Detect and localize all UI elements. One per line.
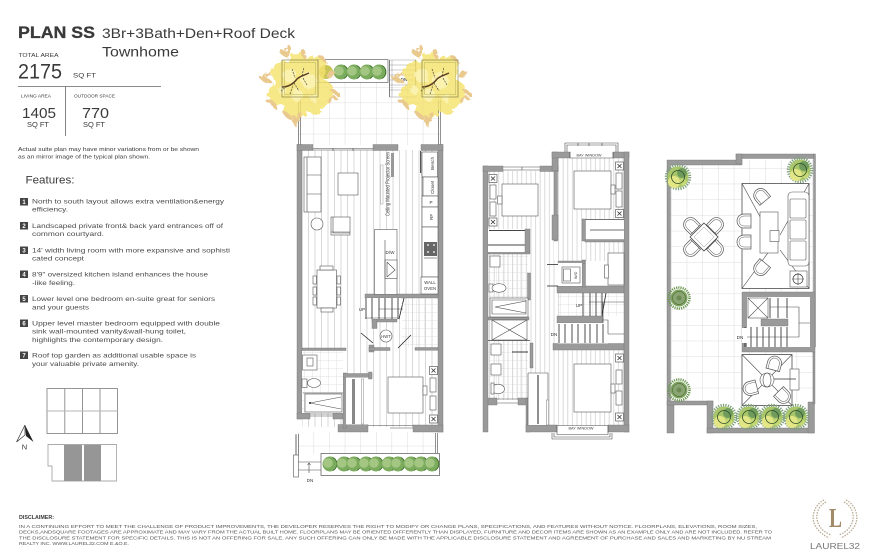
living area: SQ FT	[27, 122, 50, 129]
roof planter plants	[712, 406, 808, 428]
north arrow: N	[22, 442, 27, 452]
bay window top	[565, 143, 618, 158]
deck tile	[670, 160, 815, 402]
armchair	[331, 217, 350, 235]
feature 5: Lower level one bedroom en-suite great for seniors	[32, 296, 216, 303]
top-right plant	[788, 158, 812, 182]
second floor plan	[483, 143, 629, 439]
ground floor plan	[260, 45, 473, 483]
roof deck plan	[666, 154, 816, 433]
right bottom bedroom	[574, 354, 624, 421]
key plan: upper building block	[47, 388, 118, 434]
feature 1	[20, 198, 225, 214]
plan variation note: as an mirror image of the typical plan shown.	[18, 154, 150, 160]
linen closet	[492, 320, 527, 340]
upper bath	[488, 254, 530, 317]
roof access stair: DN	[737, 335, 743, 340]
side plants	[668, 288, 690, 400]
feature 3: 3	[22, 248, 26, 254]
utility hall tile	[402, 298, 438, 347]
feature 4	[20, 270, 208, 287]
outdoor space: SQ FT	[83, 122, 106, 129]
sofa	[304, 157, 321, 212]
coffee table	[338, 173, 358, 195]
north arrow	[16, 425, 34, 452]
staircase: UP	[359, 307, 365, 312]
study desk	[604, 253, 624, 285]
outdoor space: 770	[82, 106, 109, 122]
disclaimer body: IN A CONTINUING EFFORT TO MEET THE CHALLENGE OF PRODUCT IMPROVEMENTS, THE DEVELOPER RESERVES THE RIGHT TO MODIFY OR CHANGE PLANS, SPECIFICATIONS, AND FEATURES WITHOUT NOTICE. FLOORPLANS, ELEVATIONS, ROOM SIZES,	[19, 524, 757, 530]
plan subtitle: Townhome	[102, 44, 179, 60]
disclaimer body: THE DISCLOSURE STATEMENT FOR SPECIFIC DETAILS. THIS IS NOT AN OFFERING FOR SALE. ANY SUCH OFFERING CAN ONLY BE MADE WITH THE APPLICABLE DISCLOSURE STATEMENT AND AGREEMENT OF PURCHASE AND SALES AND MARKETING BY NU STREAM	[19, 536, 771, 542]
front patio	[296, 432, 438, 455]
feature 6: highlights the contemporary design.	[32, 337, 163, 344]
interior hardwood floor	[302, 150, 438, 427]
right top bedroom	[574, 162, 624, 218]
features heading: Features:	[26, 174, 74, 186]
yellow tree right	[392, 45, 473, 127]
features list	[20, 198, 231, 368]
kitchen wall cabinetry: P	[429, 200, 433, 205]
disclaimer	[19, 515, 772, 547]
feature 1: efficiency.	[32, 207, 68, 214]
feature 6: Upper level master bedroom equipped with double	[32, 320, 220, 328]
feature 5: and your guests	[32, 304, 90, 311]
disclaimer body	[19, 524, 772, 547]
feature 2: common courtyard.	[32, 231, 104, 238]
front sliding door	[368, 426, 413, 428]
total area: TOTAL AREA	[18, 53, 59, 59]
front entry steps	[294, 435, 321, 483]
ceiling projector screen: Ceiling Mounted Projector Screen	[386, 152, 392, 216]
parapet walls	[667, 154, 816, 433]
kitchen wall cabinetry	[420, 151, 438, 294]
outdoor sofa	[788, 192, 809, 266]
feature 5	[20, 295, 216, 311]
staircase	[359, 298, 404, 319]
kitchen wall cabinetry: WALL	[424, 280, 436, 285]
side table	[790, 271, 807, 287]
area statistics	[18, 53, 161, 136]
round side table	[311, 218, 323, 230]
feature 2	[20, 222, 223, 238]
exterior walls	[297, 144, 443, 432]
lower stairs: DN	[551, 332, 557, 337]
Laurel32 logo	[810, 500, 860, 551]
kitchen wall cabinetry: Bench	[430, 157, 435, 170]
feature 3: 14' width living room with more expansive and sophisti	[32, 247, 231, 254]
total area: 2175	[18, 60, 62, 84]
laurel wreath	[813, 500, 857, 538]
feature 1: 1	[22, 200, 26, 206]
bay window top: BAY WINDOW	[577, 154, 602, 158]
monogram L: L	[829, 503, 842, 533]
disclaimer body: DECKS,ANDSQUARE FOOTAGES ARE APPROXIMATE AND MAY VARY FROM THE ACTUAL BUILT HOME. FLOORPLANS MAY BE ORIENTED DIFFERENTLY THAN DISPLAYED, FURNITURE AND DECOR ITEMS ARE SHOWN AS AN EXAMPLE ONLY AND ARE NOT INCLUDED. REFER TO	[19, 530, 772, 536]
dining set on deck	[681, 215, 726, 259]
kitchen wall cabinetry: Closet	[430, 180, 435, 194]
logo wordmark: LAUREL32	[810, 541, 860, 551]
rear sliding door	[313, 148, 373, 151]
feature 3	[20, 246, 231, 262]
kitchen island: D/W	[386, 250, 395, 255]
left bedroom	[489, 174, 538, 226]
floor finish	[488, 158, 624, 426]
lower stairs	[551, 320, 608, 344]
right top closet	[582, 219, 624, 242]
rear patio	[298, 82, 440, 145]
ground floor closet	[346, 378, 368, 424]
feature 7: Roof top garden as additional usable space is	[32, 353, 197, 360]
utility doors	[361, 333, 411, 348]
living area: LIVING AREA	[21, 94, 51, 98]
living area	[21, 94, 56, 129]
total area: SQ FT	[73, 72, 96, 80]
front planter	[321, 454, 440, 476]
yellow tree left	[260, 45, 341, 127]
bay window bottom	[552, 426, 612, 439]
ceiling projector screen	[380, 152, 394, 216]
lounge rug and seating	[737, 184, 809, 288]
feature 6	[20, 320, 220, 344]
upper stairs	[558, 293, 624, 334]
outdoor space: OUTDOOR SPACE	[74, 94, 115, 98]
plan variation note	[18, 147, 199, 160]
feature 2: 2	[22, 224, 26, 230]
feature 5: 5	[22, 297, 26, 303]
kitchen wall cabinetry: OVEN	[424, 286, 436, 291]
feature 4: -like feeling.	[32, 280, 75, 287]
feature 4: 8'9" oversized kitchen island enhances the house	[32, 272, 208, 279]
corner plants	[666, 166, 690, 188]
plan variation note: Actual suite plan may have minor variations from or be shown	[18, 147, 199, 153]
upper stairs: UP	[576, 303, 582, 308]
feature 7	[20, 352, 197, 368]
feature 3: cated concept	[32, 256, 84, 262]
key plan: lower building block with highlighted units	[48, 444, 116, 481]
rear yard steps: DN	[401, 77, 407, 82]
feature 7: your valuable private amenity.	[32, 361, 139, 368]
top-left window	[503, 167, 540, 170]
left closet	[488, 229, 530, 252]
walls	[483, 152, 629, 432]
feature 2: Landscaped private front& back yard entrances off of	[32, 223, 223, 230]
disclaimer heading: DISCLAIMER:	[19, 515, 54, 521]
master ensuite	[488, 340, 533, 403]
feature 4: 4	[22, 272, 26, 278]
feature 7: 7	[22, 354, 26, 360]
feature 1: North to south layout allows extra ventilation&energy	[32, 198, 225, 206]
total area	[18, 53, 96, 84]
outdoor space	[74, 94, 115, 129]
rear yard steps	[390, 60, 416, 97]
hot water tank	[380, 330, 392, 342]
ground floor bed	[388, 366, 438, 423]
dining set	[313, 266, 340, 312]
front entry steps: DN	[307, 478, 313, 483]
disclaimer body: REALTY INC. WWW.LAUREL32.COM E.&O.E.	[19, 541, 129, 547]
kitchen wall cabinetry: RF	[429, 214, 434, 220]
heading block	[18, 23, 295, 60]
living area: 1405	[22, 106, 56, 122]
hot water tank: HWT	[381, 334, 391, 339]
roof access stair	[737, 292, 815, 352]
bay window bottom: BAY WINDOW	[569, 426, 594, 430]
round table lounge	[741, 354, 799, 406]
rear yard planter	[318, 60, 388, 82]
laundry	[547, 263, 582, 286]
ground floor bathroom	[302, 351, 343, 416]
feature 6: 6	[22, 322, 26, 328]
kitchen island	[374, 230, 397, 294]
plan type: 3Br+3Bath+Den+Roof Deck	[102, 26, 295, 41]
feature 6: sink wall-mounted vanity&wall-hung toilet,	[32, 329, 186, 336]
laundry: W/D	[574, 271, 578, 279]
plan title: PLAN SS	[18, 23, 95, 42]
master closet	[528, 373, 548, 425]
